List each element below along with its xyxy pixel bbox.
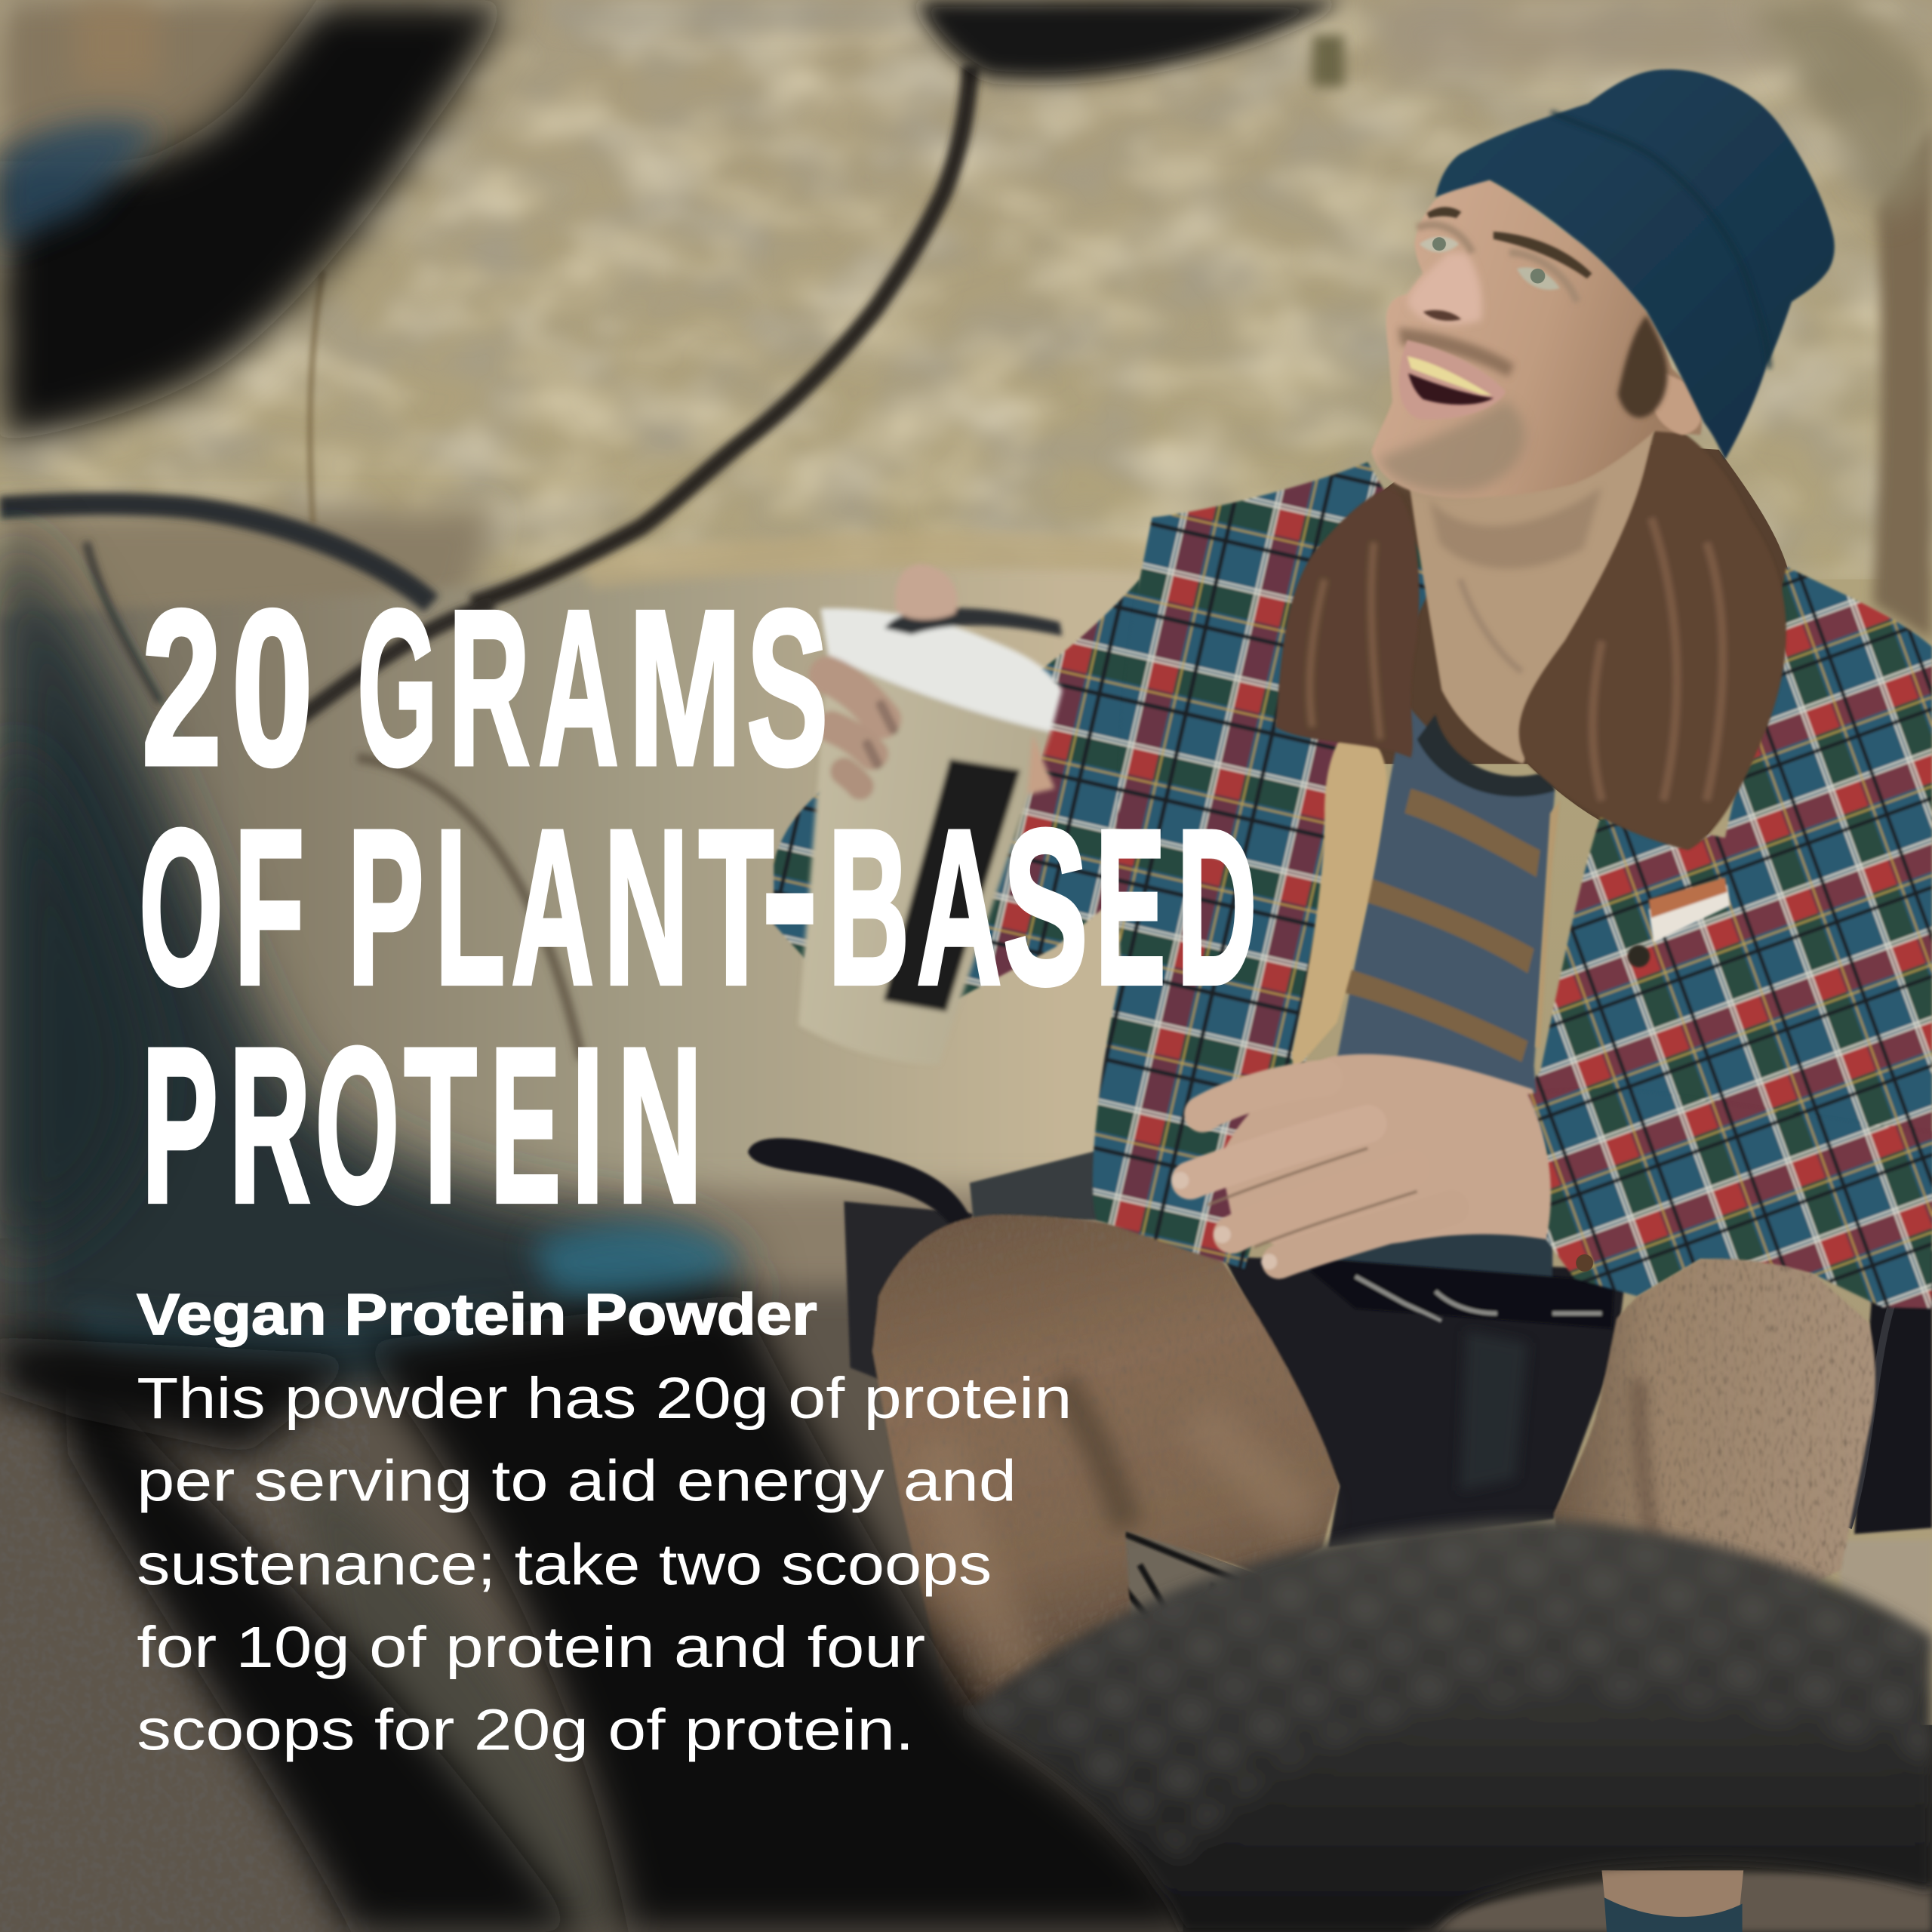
stubble shadows <box>1377 401 1525 492</box>
headline line 2: F <box>234 783 304 1030</box>
lower black tyre bands <box>62 1337 579 1932</box>
jacket torso <box>1093 462 1435 1269</box>
headline line 2: O <box>139 783 223 1030</box>
sherpa collar lining <box>1291 727 1386 1072</box>
bottom right gravel and sock <box>1183 1725 1932 1932</box>
body description: for 10g of protein and four <box>137 1616 925 1680</box>
top-left bike frame blur <box>0 0 512 442</box>
face <box>1371 180 1702 498</box>
shorts <box>1223 1257 1626 1548</box>
headline line 2: L <box>435 783 505 1030</box>
jacket cuff <box>1527 1089 1932 1309</box>
headline line 3: T <box>405 1001 477 1248</box>
neck <box>1407 431 1655 764</box>
blurred background wires <box>0 66 971 1060</box>
headline line 1: G <box>357 564 438 811</box>
headline line 1: R <box>448 564 530 811</box>
lower-left gravel patch <box>284 1441 635 1932</box>
product subheading: Vegan Protein Powder <box>137 1283 817 1347</box>
body description: This powder has 20g of protein <box>137 1367 1072 1431</box>
headline line 2: A <box>917 783 1001 1030</box>
headline line 2: T <box>699 783 774 1030</box>
mouth <box>1399 340 1506 420</box>
sideburn <box>1618 315 1667 417</box>
far leg <box>1554 1259 1875 1601</box>
headline line 3: R <box>229 1001 310 1248</box>
headline line 2: N <box>604 783 689 1030</box>
foreground knobby tyre <box>968 1519 1932 1932</box>
near leg <box>872 1215 1340 1706</box>
headline line 3: O <box>315 1001 399 1248</box>
resting hand <box>1172 1054 1560 1269</box>
protein shaker and gripping hand <box>798 565 1062 1065</box>
headline line 2: A <box>512 783 594 1030</box>
jacket right side <box>1527 567 1932 1239</box>
headline line 1: S <box>746 564 828 811</box>
striped t-shirt <box>1281 703 1555 1281</box>
man in plaid jacket <box>748 69 1932 1706</box>
ear <box>1651 370 1702 435</box>
hair behind <box>1279 444 1793 851</box>
headline line 2: S <box>1003 783 1088 1030</box>
headline line 2: P <box>347 783 424 1030</box>
headline line 3: P <box>142 1001 218 1248</box>
eyes <box>1420 236 1459 252</box>
body description: per serving to aid energy and <box>137 1450 1017 1514</box>
moustache <box>1398 328 1515 377</box>
headline line 2: D <box>1177 783 1257 1030</box>
beanie <box>1435 69 1835 460</box>
headline line 3: N <box>617 1001 703 1248</box>
headline line 3: I <box>572 1001 604 1248</box>
body description: scoops for 20g of protein. <box>137 1698 914 1762</box>
headline line 1: A <box>538 564 619 811</box>
body description <box>137 1367 1072 1762</box>
jacket sleeve holding shaker <box>774 579 1146 998</box>
folding chair <box>748 1138 1932 1651</box>
headline line 1: 0 <box>232 564 313 811</box>
eye sockets <box>1417 225 1577 302</box>
tree at right edge <box>1749 0 1932 641</box>
headline line 2: B <box>828 783 909 1030</box>
nose <box>1407 253 1482 325</box>
chest pocket label <box>1628 877 1730 968</box>
top-centre blur <box>918 0 1343 78</box>
headline line 2: E <box>1095 783 1165 1030</box>
belt and carabiner <box>1294 1257 1614 1328</box>
headline line 1: 2 <box>142 564 222 811</box>
eyebrows <box>1427 207 1592 278</box>
headline <box>139 564 1257 1248</box>
headline line 1: M <box>629 564 742 811</box>
left dark teal mass <box>0 524 741 1365</box>
headline line 3: E <box>491 1001 561 1248</box>
headline line 2: - <box>761 766 818 1013</box>
body description: sustenance; take two scoops <box>137 1534 992 1598</box>
hair front locks <box>1275 419 1786 851</box>
